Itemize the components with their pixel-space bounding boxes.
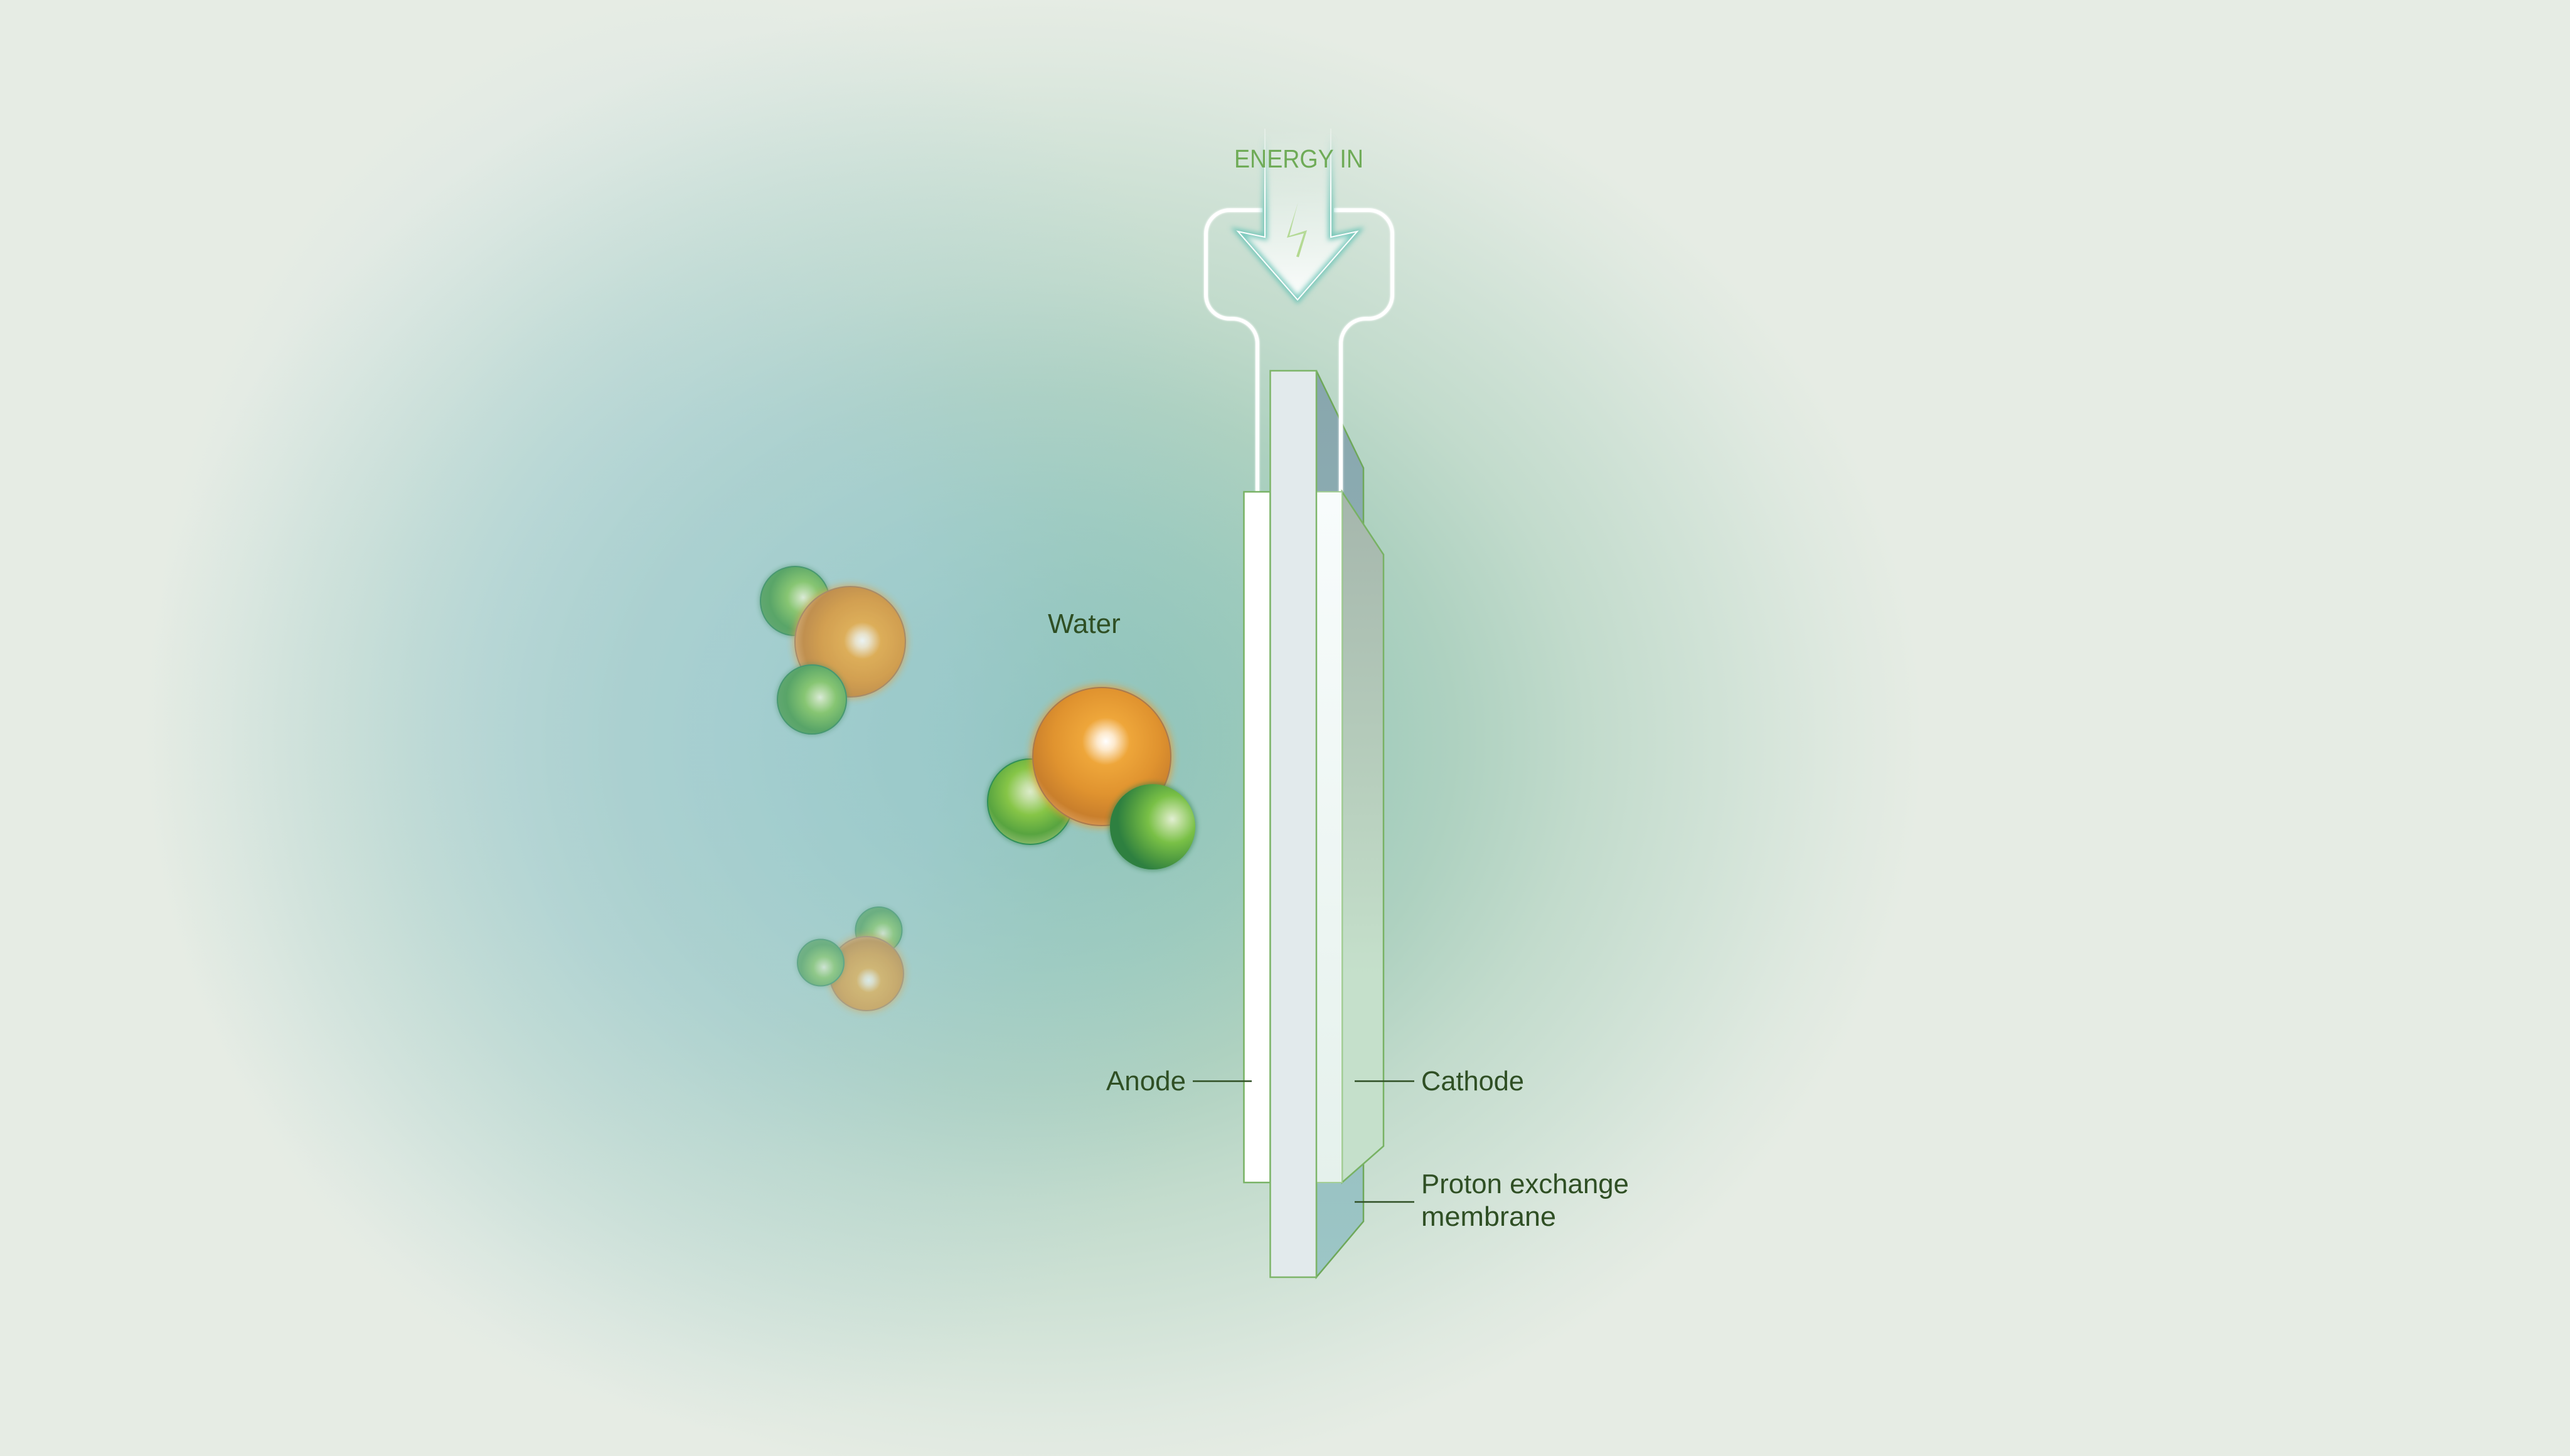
molecule: upper water, mid distance (759, 565, 907, 735)
molecule: lower water, far distance (797, 906, 905, 1012)
proton exchange membrane label: membrane (1421, 1201, 1556, 1232)
proton exchange membrane front (1270, 371, 1316, 1277)
circuit wire outline (1206, 210, 1392, 492)
proton exchange membrane label (1355, 1169, 1629, 1232)
energy in arrow (1238, 129, 1357, 300)
water label: Water (1048, 608, 1121, 639)
proton exchange membrane label: Proton exchange (1421, 1169, 1629, 1199)
energy in label: ENERGY IN (1234, 144, 1363, 173)
anode label: Anode (1106, 1066, 1186, 1097)
membrane rear side face (1316, 371, 1363, 1277)
molecule: large water (986, 686, 1197, 871)
cathode electrode (1316, 492, 1384, 1182)
anode electrode (1244, 492, 1270, 1182)
icon: lightning bolt (1287, 202, 1307, 257)
cathode label: Cathode (1421, 1066, 1524, 1097)
